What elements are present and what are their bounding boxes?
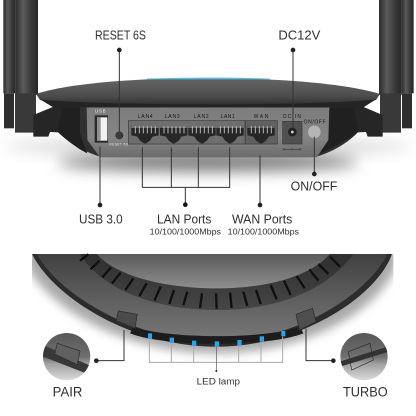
PAIR callout xyxy=(43,330,124,400)
vent ring xyxy=(80,254,353,310)
LAN callout bracket xyxy=(142,147,230,237)
turbo button xyxy=(296,308,316,330)
LAN ports group: LAN4 xyxy=(138,114,153,120)
LAN ports group: LAN3 xyxy=(165,114,180,120)
pair button xyxy=(116,311,137,328)
router top dome xyxy=(36,78,380,107)
router rear body xyxy=(57,103,359,157)
WAN port xyxy=(245,114,277,144)
WAN callout xyxy=(228,155,299,237)
right antennas xyxy=(337,0,414,137)
power button: ON/OFF xyxy=(304,119,326,125)
reset button xyxy=(109,131,129,147)
inner dome xyxy=(97,254,330,288)
LAN callout bracket: 10/100/1000Mbps xyxy=(150,227,221,237)
LAN ports group xyxy=(128,114,245,144)
power button xyxy=(304,119,326,138)
WAN callout: WAN Ports xyxy=(232,212,293,227)
LAN ports group: LAN1 xyxy=(221,114,235,120)
DC12V callout xyxy=(278,27,320,128)
USB port xyxy=(95,109,108,143)
WAN callout: 10/100/1000Mbps xyxy=(228,227,299,237)
underside close-up shadow xyxy=(27,250,397,353)
LED bracket and label: LED lamp xyxy=(197,377,240,387)
DC12V callout: DC12V xyxy=(278,27,320,42)
RESET callout: RESET 6S xyxy=(95,27,146,42)
TURBO callout: TURBO xyxy=(343,384,388,400)
RESET callout xyxy=(95,27,146,132)
WAN port: WAN xyxy=(254,114,269,120)
DC power jack: DC IN xyxy=(283,114,301,120)
USB port: USB xyxy=(95,109,106,114)
PAIR callout: PAIR xyxy=(53,384,82,400)
DC power jack xyxy=(283,114,302,151)
LED bracket and label xyxy=(149,337,283,387)
LAN ports group: LAN2 xyxy=(194,114,209,120)
left antennas xyxy=(3,0,80,137)
USB callout xyxy=(79,147,123,226)
ON/OFF callout: ON/OFF xyxy=(291,179,337,194)
USB callout: USB 3.0 xyxy=(79,211,123,226)
rear port panel xyxy=(87,107,329,157)
reset button: RESET 6S xyxy=(109,143,129,147)
vent slots xyxy=(80,254,340,309)
ON/OFF callout xyxy=(291,137,337,194)
LAN callout bracket: LAN Ports xyxy=(157,212,212,227)
LED lamps xyxy=(148,331,285,347)
black LED strip xyxy=(130,327,303,344)
router floor shadow xyxy=(5,143,411,171)
TURBO callout xyxy=(306,328,388,400)
router underside close-up xyxy=(32,254,392,347)
